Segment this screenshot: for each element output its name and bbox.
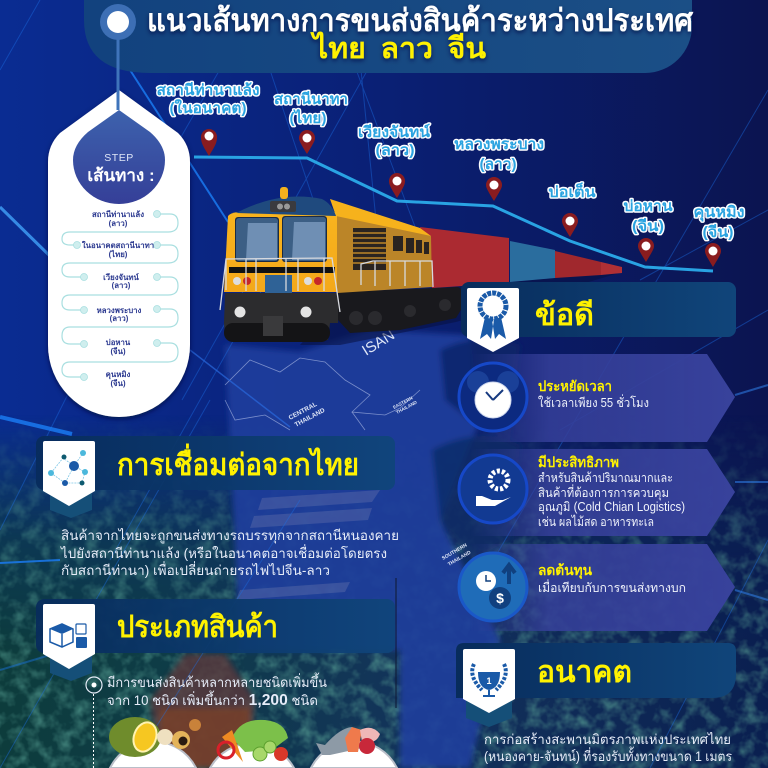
- route steps: (ลาว): [112, 281, 131, 290]
- body text: ไปยังสถานีท่านาแล้ง (หรือในอนาคตอาจเชื่อมต่อโดยตรง: [60, 544, 387, 561]
- body text: การก่อสร้างสะพานมิตรภาพแห่งประเทศไทย: [484, 732, 731, 747]
- card: lower cost: $: [496, 590, 504, 606]
- station labels: (ลาว): [480, 156, 517, 173]
- map borders and region labels: THAILAND: [294, 407, 327, 429]
- route steps: (ลาว): [110, 314, 129, 323]
- card: lower cost: ลดต้นทุน: [538, 562, 592, 579]
- wheels: [349, 299, 451, 325]
- heading: การเชื่อมต่อจากไทย: [117, 443, 359, 482]
- section: advantages: [459, 282, 736, 631]
- card: efficiency: เช่น ผลไม้สด อาหารทะเล: [538, 515, 654, 529]
- station labels: สถานีท่านาแล้ง: [156, 82, 260, 99]
- heading bar: [36, 599, 395, 653]
- train: [220, 187, 622, 345]
- lower front: [224, 293, 338, 342]
- station labels: (ในอนาคต): [170, 99, 247, 117]
- route steps: (ไทย): [109, 249, 128, 259]
- railings: [220, 258, 433, 312]
- bullet text: จาก 10 ชนิด เพิ่มขึ้นกว่า 1,200 ชนิด: [107, 690, 318, 709]
- card: lower cost: เมื่อเทียบกับการขนส่งทางบก: [538, 579, 686, 595]
- station labels: สถานีนาทา: [274, 91, 348, 108]
- card: save time: ใช้เวลาเพียง 55 ชั่วโมง: [538, 394, 649, 410]
- station labels: บ่อหาน: [624, 198, 673, 215]
- undercarriage: [338, 287, 470, 333]
- plate: vegetables: [210, 720, 294, 768]
- windshields: [235, 217, 279, 262]
- badge: ribbon: [467, 288, 519, 352]
- badge: boxes: [43, 604, 95, 681]
- route steps: (จีน): [110, 378, 126, 388]
- card: save time: [459, 354, 735, 442]
- card: efficiency: สินค้าที่ต้องการการควบคุม: [538, 484, 669, 501]
- heading: ประเภทสินค้า: [117, 611, 278, 644]
- body text: [484, 732, 732, 764]
- side vents and windows: [353, 228, 429, 270]
- heading bar: [36, 436, 395, 490]
- route steps: เวียงจันทน์: [103, 272, 140, 282]
- badge: trophy: 1: [486, 676, 492, 686]
- map borders and region labels: ISAN: [359, 326, 398, 359]
- body text: สินค้าจากไทยจะถูกขนส่งทางรถบรรทุกจากสถานีหนองคาย: [61, 528, 399, 544]
- map borders and region labels: EASTERN: [392, 395, 413, 410]
- body text: กับสถานีท่านา) เพื่อเปลี่ยนถ่ายรถไฟไปจีน-ลาว: [61, 561, 330, 578]
- drop heading: STEP: [104, 152, 134, 164]
- card: efficiency: สำหรับสินค้าปริมาณมากและ: [538, 471, 673, 485]
- drop heading: เส้นทาง :: [87, 166, 155, 185]
- badge: trophy: [463, 649, 515, 727]
- route steps: คุนหมิง: [106, 370, 131, 380]
- card: efficiency: [459, 449, 735, 536]
- section: product types: [36, 599, 397, 768]
- route steps: บ่อหาน: [106, 338, 131, 347]
- station labels: (ลาว): [376, 142, 415, 159]
- heading: อนาคต: [537, 656, 632, 689]
- section: connection from Thailand: [36, 436, 399, 578]
- route steps: [62, 209, 178, 388]
- bullet text: [86, 672, 327, 768]
- section: future: [456, 643, 736, 764]
- heading: ข้อดี: [535, 299, 594, 332]
- map borders and region labels: CENTRAL: [288, 401, 318, 422]
- map borders and region labels: SOUTHERN: [441, 542, 469, 562]
- station labels: คุนหมิง: [694, 203, 744, 222]
- locomotive front: [224, 212, 337, 292]
- station labels: บ่อเต็น: [548, 182, 596, 201]
- station labels: เวียงจันทน์: [358, 123, 431, 141]
- route steps: สถานีท่านาแล้ง: [92, 209, 144, 219]
- containers: [420, 227, 622, 288]
- route steps: (ลาว): [109, 219, 128, 228]
- station labels: (จีน): [702, 224, 734, 241]
- station labels: หลวงพระบาง: [454, 136, 544, 153]
- connector pin: [100, 4, 136, 110]
- card: save time: ประหยัดเวลา: [538, 378, 612, 394]
- heading bar: [461, 282, 736, 337]
- body text: [60, 528, 399, 578]
- ground shadow: [300, 272, 622, 345]
- badge: network: [43, 441, 95, 518]
- map borders and region labels: THAILAND: [447, 550, 472, 568]
- card: efficiency: อุณภูมิ (Cold Chian Logistics): [538, 500, 685, 515]
- bullet text: มีการขนส่งสินค้าหลากหลายชนิดเพิ่มขึ้น: [107, 672, 327, 690]
- map borders and region labels: [225, 326, 472, 568]
- station labels: [156, 82, 744, 241]
- heading bar: [456, 643, 736, 698]
- map borders and region labels: THAILAND: [395, 399, 418, 415]
- route steps: ในอนาคตสถานีนาทา: [82, 240, 154, 250]
- title banner: [84, 0, 694, 73]
- title: ไทย ลาว จีน: [310, 31, 486, 65]
- step panel: [48, 4, 190, 417]
- station pins: [201, 129, 721, 267]
- title: [147, 3, 694, 65]
- title: แนวเส้นทางการขนส่งสินค้าระหว่างประเทศ: [147, 3, 694, 38]
- station labels: (ไทย): [290, 108, 326, 127]
- locomotive side: [336, 205, 432, 293]
- plate: fruit: [109, 717, 196, 768]
- route steps: หลวงพระบาง: [97, 306, 142, 315]
- drop heading: [73, 110, 165, 204]
- station labels: (จีน): [632, 218, 664, 235]
- card: efficiency: มีประสิทธิภาพ: [538, 454, 619, 470]
- card: lower cost: [459, 544, 735, 631]
- route steps: (จีน): [110, 346, 126, 356]
- route line: [194, 157, 713, 271]
- body text: (หนองคาย-จันทน์) ที่รองรับทั้งทางขนาด 1 เมตร: [484, 746, 732, 764]
- plate: meat and seafood: [311, 727, 397, 768]
